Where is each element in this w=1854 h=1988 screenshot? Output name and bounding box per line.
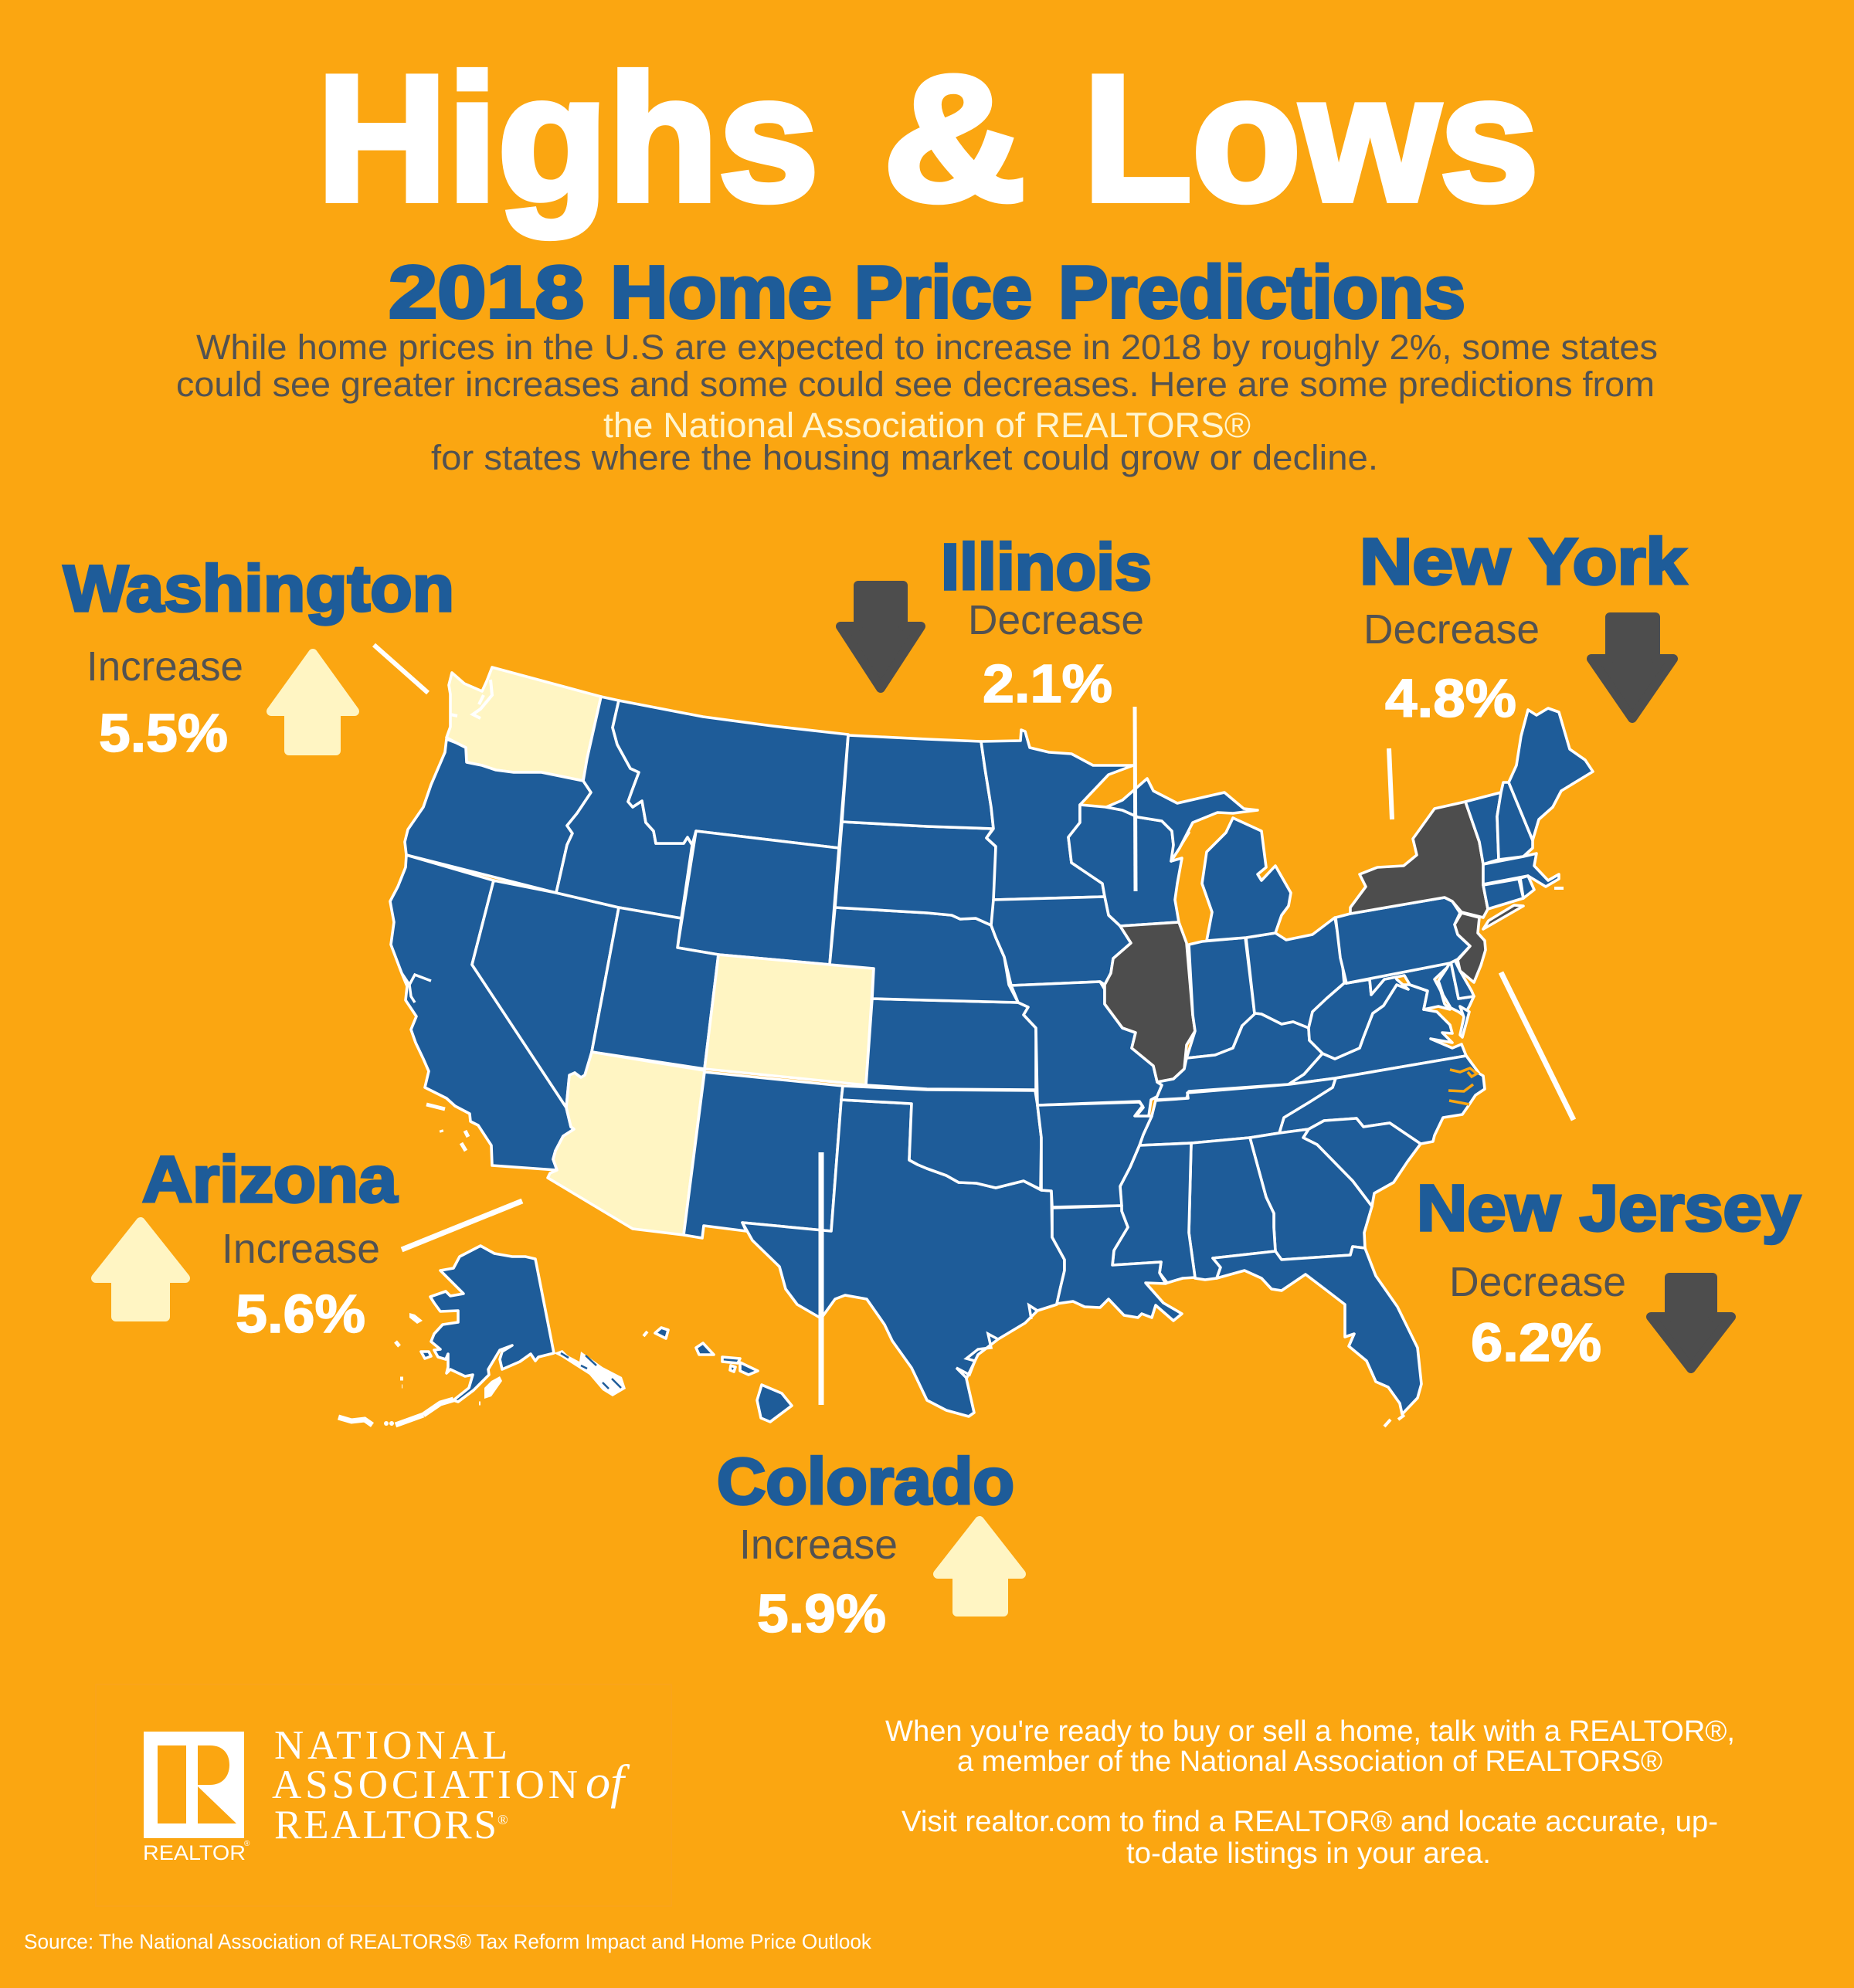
organization name: ASSOCIATION	[272, 1762, 578, 1807]
state: Florida	[1213, 1247, 1421, 1414]
state: Nevada	[472, 880, 619, 1108]
state: Washington	[447, 667, 601, 781]
state: North Carolina	[1279, 1056, 1485, 1144]
callout: Washington: Washington	[63, 552, 454, 625]
state: Colorado	[705, 955, 874, 1085]
San Francisco Bay	[402, 973, 431, 1002]
panel: logo: ®	[244, 1840, 250, 1848]
intro text: While home prices in the U.S are expected to increase in 2018 by roughly 2%, some states	[196, 327, 1658, 367]
state: Tennessee	[1139, 1078, 1336, 1145]
state: Michigan lower	[1202, 818, 1291, 941]
callout: New Jersey: Decrease	[1449, 1259, 1626, 1305]
panel: logo	[96, 1684, 671, 1906]
state: Wisconsin	[1068, 805, 1189, 926]
callout: New York: Decrease	[1363, 606, 1540, 653]
state: Kansas	[866, 999, 1036, 1090]
state: Georgia	[1250, 1129, 1372, 1260]
callout: Illinois: Decrease	[968, 597, 1144, 643]
Alaska panhandle	[554, 1350, 626, 1396]
state: Arkansas	[1037, 1102, 1152, 1207]
callout: Colorado: Increase	[739, 1522, 898, 1568]
state: New Mexico	[684, 1072, 843, 1238]
state: Illinois	[1105, 922, 1195, 1082]
icon: down arrow	[1651, 1277, 1731, 1369]
state: Montana	[613, 701, 848, 848]
state: Connecticut	[1483, 879, 1523, 909]
callout: New York: New York	[1360, 525, 1686, 598]
organization name: of	[586, 1756, 630, 1809]
state: Nebraska	[830, 907, 1018, 1002]
callout line: New Jersey	[1501, 972, 1574, 1120]
state: South Carolina	[1303, 1118, 1421, 1206]
callout: Colorado: Colorado	[717, 1445, 1014, 1518]
organization name: ®	[497, 1812, 508, 1827]
state: Michigan upper	[1106, 779, 1258, 861]
callout: Illinois: Illinois	[941, 531, 1152, 603]
state: Oregon	[405, 739, 591, 893]
state: Idaho	[556, 697, 692, 918]
state: Minnesota	[981, 730, 1133, 900]
title: &	[883, 39, 1026, 239]
title	[317, 39, 1539, 239]
call to action text	[885, 1715, 1735, 1870]
state: Maine	[1509, 708, 1593, 840]
subtitle	[389, 251, 1465, 334]
icon: REALTOR R mark	[144, 1732, 244, 1838]
callout line: Washington	[374, 645, 428, 693]
state: South Dakota	[835, 822, 996, 925]
state: Hawaii	[643, 1328, 792, 1422]
state: Virginia	[1289, 985, 1466, 1084]
state: Wyoming	[677, 831, 839, 965]
Nunivak island	[421, 1352, 431, 1359]
state: New York	[1350, 802, 1488, 918]
state: Mississippi	[1112, 1143, 1195, 1283]
call to action text: When you're ready to buy or sell a home, talk with a REALTOR®,	[885, 1715, 1735, 1748]
Channel Islands	[426, 1104, 468, 1151]
call to action text: Visit realtor.com to find a REALTOR® and locate accurate, up-	[902, 1806, 1718, 1838]
subtitle: Home	[610, 251, 832, 334]
state: Oklahoma	[841, 1086, 1041, 1189]
icon: up arrow	[938, 1521, 1021, 1612]
callout: New York: 4.8%	[1385, 668, 1516, 728]
state: Louisiana	[1052, 1206, 1182, 1321]
call to action text: a member of the National Association of REALTORS®	[957, 1745, 1662, 1778]
state: Arizona	[548, 1052, 705, 1235]
callout: Illinois: 2.1%	[983, 653, 1112, 714]
callout line: New York	[1389, 748, 1392, 819]
subtitle: Predictions	[1058, 251, 1465, 334]
icon: up arrow	[271, 653, 355, 751]
state: Iowa	[991, 897, 1131, 986]
Kodiak island	[484, 1376, 502, 1399]
callout line: Illinois	[1135, 707, 1136, 891]
Florida keys	[1384, 1415, 1404, 1427]
callout: Colorado	[717, 1445, 1021, 1644]
Maryland eastern shore	[1438, 962, 1474, 1016]
call to action text: to-date listings in your area.	[1126, 1837, 1491, 1870]
callout: New York	[1360, 525, 1686, 728]
callout: New Jersey: New Jersey	[1417, 1172, 1801, 1244]
intro text: could see greater increases and some could see decreases. Here are some predictions from	[176, 365, 1655, 404]
callout: Arizona: Increase	[222, 1226, 380, 1272]
state: Massachusetts	[1483, 853, 1559, 887]
state: Delaware	[1451, 960, 1474, 999]
callout: Arizona: Arizona	[142, 1143, 398, 1216]
organization name: REALTORS	[274, 1803, 497, 1847]
state: West Virginia	[1309, 976, 1408, 1059]
Texas coast detail	[956, 1305, 1037, 1379]
Puget Sound islands	[450, 680, 492, 718]
intro text	[176, 327, 1658, 477]
organization name: NATIONAL	[274, 1723, 508, 1768]
Virginia eastern shore	[1460, 1006, 1469, 1037]
title: Lows	[1083, 39, 1539, 239]
state: Ohio	[1246, 918, 1344, 1028]
Aleutian islands	[338, 1399, 453, 1425]
intro text: the National Association of REALTORS®	[603, 405, 1251, 445]
Albemarle and Pamlico sounds	[1448, 1068, 1477, 1104]
state: Alaska	[338, 1246, 626, 1426]
state: Pennsylvania	[1336, 897, 1470, 983]
callout: Washington: Increase	[87, 643, 243, 690]
intro text: for states where the housing market could grow or decline.	[431, 438, 1378, 477]
state: North Dakota	[842, 735, 993, 829]
source: Source: The National Association of REALTORS® Tax Reform Impact and Home Price Outlook	[24, 1930, 871, 1953]
icon: down arrow	[1591, 617, 1673, 718]
callout: Colorado: 5.9%	[757, 1583, 886, 1644]
callout: New Jersey: 6.2%	[1471, 1312, 1601, 1372]
US map	[338, 667, 1593, 1427]
state: Kentucky	[1156, 1013, 1323, 1100]
organization name	[272, 1723, 630, 1847]
state: Texas	[742, 1100, 1065, 1416]
state: Maryland	[1346, 963, 1450, 1009]
St Lawrence island	[409, 1313, 423, 1324]
callout: Illinois	[840, 531, 1152, 714]
Cape islands	[1554, 887, 1564, 890]
callout: New Jersey	[1417, 1172, 1801, 1372]
Long Island	[1483, 905, 1523, 929]
logo caption: REALTOR	[143, 1841, 246, 1864]
state: Vermont	[1465, 792, 1501, 864]
state: Utah	[592, 907, 718, 1069]
state: California	[390, 855, 574, 1170]
icon: down arrow	[840, 585, 921, 688]
title: Highs	[317, 39, 819, 239]
subtitle: Price	[854, 251, 1032, 334]
state: Alabama	[1189, 1138, 1275, 1280]
icon: up arrow	[96, 1222, 185, 1317]
callout: Arizona	[96, 1143, 398, 1344]
state: Indiana	[1187, 938, 1255, 1058]
callout: Washington	[63, 552, 454, 763]
callout: Arizona: 5.6%	[236, 1284, 365, 1344]
callout: Washington: 5.5%	[99, 703, 228, 763]
callout line: Colorado	[819, 1152, 823, 1405]
callout line: Arizona	[402, 1201, 522, 1250]
subtitle: 2018	[389, 251, 584, 334]
state: New Jersey	[1455, 913, 1486, 982]
state: New Hampshire	[1497, 782, 1533, 860]
state: Rhode Island	[1520, 876, 1534, 898]
state: Missouri	[1011, 982, 1162, 1117]
